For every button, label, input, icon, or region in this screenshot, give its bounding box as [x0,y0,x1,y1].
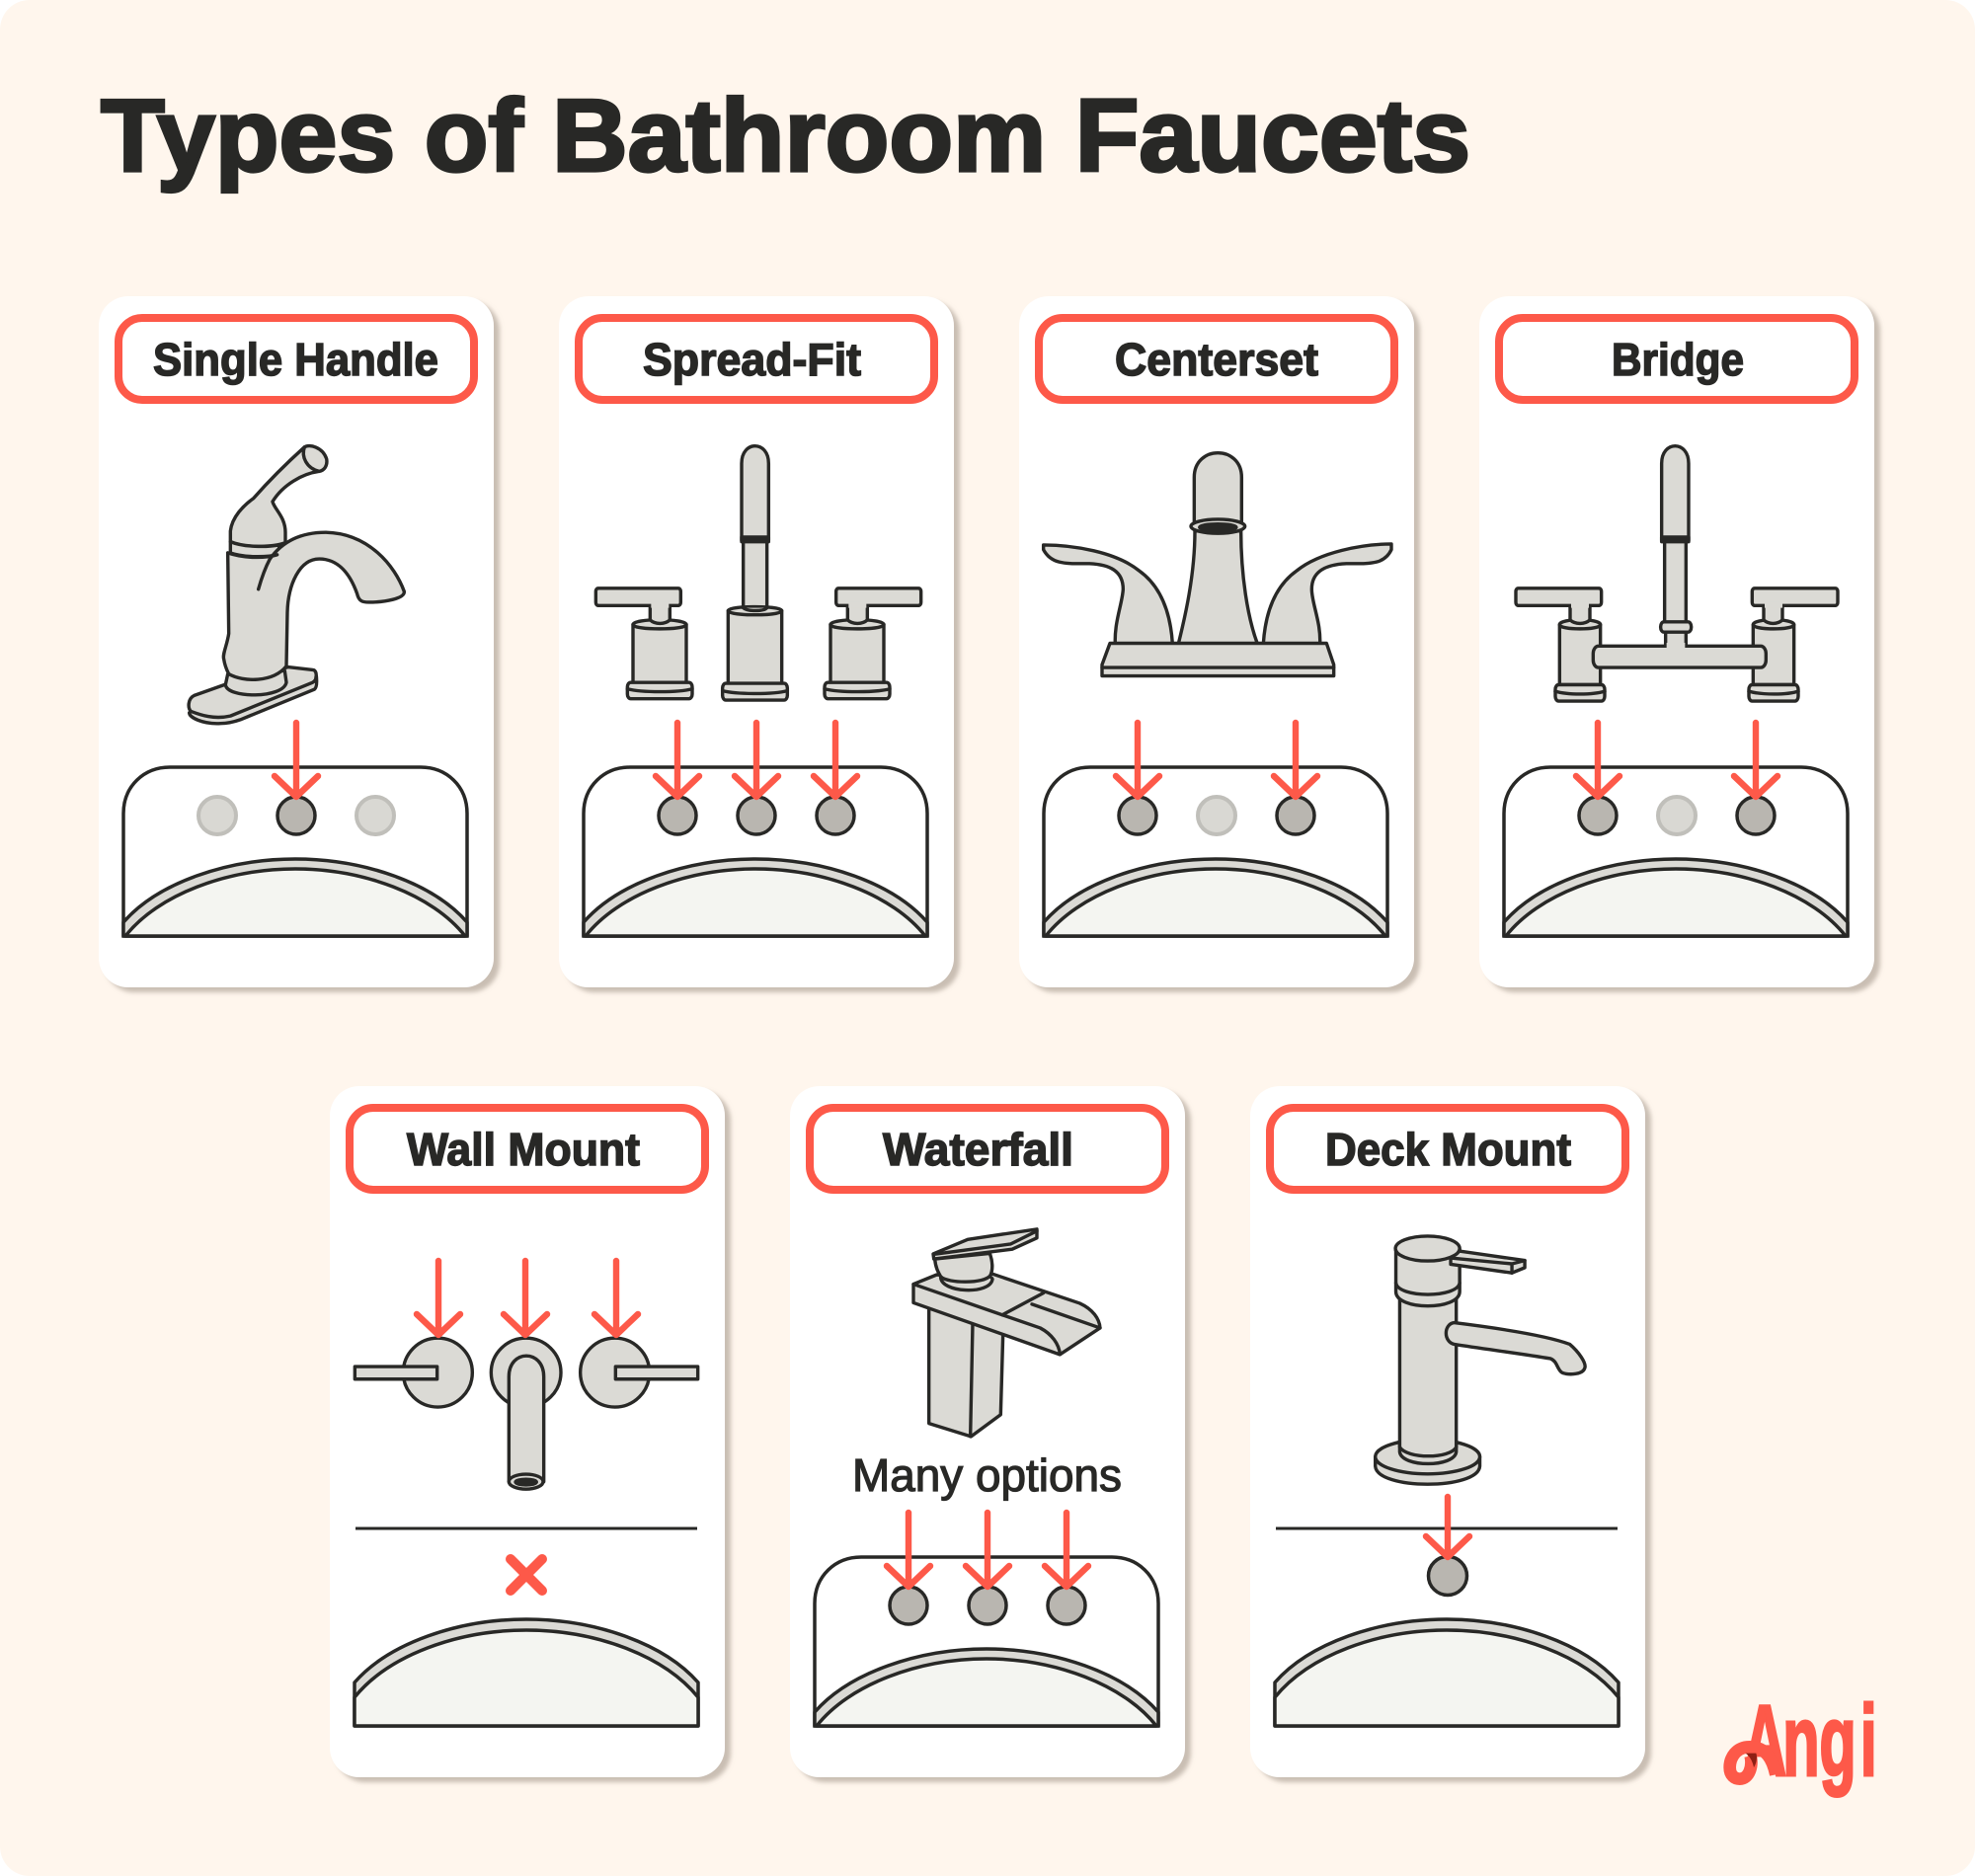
sink with three holes [584,767,927,936]
title: Types of Bathroom Faucets [101,79,1470,194]
icon: spread-fit faucet [595,446,921,700]
icon: bridge faucet [1516,446,1838,701]
arrows [887,1513,1088,1587]
arrows [656,723,857,797]
icon: centerset faucet [1044,453,1391,676]
heading: Wall Mount: Wall Mount [407,1124,640,1175]
heading: Waterfall: Waterfall [883,1124,1073,1175]
note: Many options: Many options [852,1449,1122,1501]
sink with three holes [123,767,467,936]
panel: Single Handle [99,296,494,987]
left handle [595,588,692,699]
arrow [1426,1497,1469,1557]
heading: Centerset: Centerset [1115,334,1318,385]
logo: Angi: Angi [1743,1684,1877,1797]
panel: Waterfall [790,1086,1185,1777]
sink basin [355,1619,698,1726]
panel: Wall Mount [330,1086,725,1777]
right valve [1749,588,1838,701]
heading: Spread-Fit: Spread-Fit [643,334,861,385]
icon: deck mount faucet [1376,1236,1585,1484]
icon: red X [511,1559,542,1591]
panel: Deck Mount [1250,1086,1645,1777]
panel: Centerset [1019,296,1414,987]
sink with three holes [1044,767,1387,936]
left valve [1516,588,1605,701]
sink with three holes [815,1557,1158,1726]
icon: single handle faucet [189,446,404,724]
heading: Deck Mount: Deck Mount [1325,1124,1571,1175]
arrow [275,723,318,797]
sink with three holes [1504,767,1848,936]
sink basin [1275,1619,1619,1726]
arrows [1116,723,1317,797]
right handle [825,588,921,699]
icon: wall mount faucet [355,1338,698,1489]
arrows [417,1261,638,1335]
arrows [1576,723,1778,797]
heading: Single Handle: Single Handle [153,334,438,385]
panel: Bridge [1479,296,1874,987]
panel: Spread-Fit [559,296,954,987]
heading: Bridge: Bridge [1612,334,1744,385]
icon: waterfall faucet [913,1229,1100,1437]
